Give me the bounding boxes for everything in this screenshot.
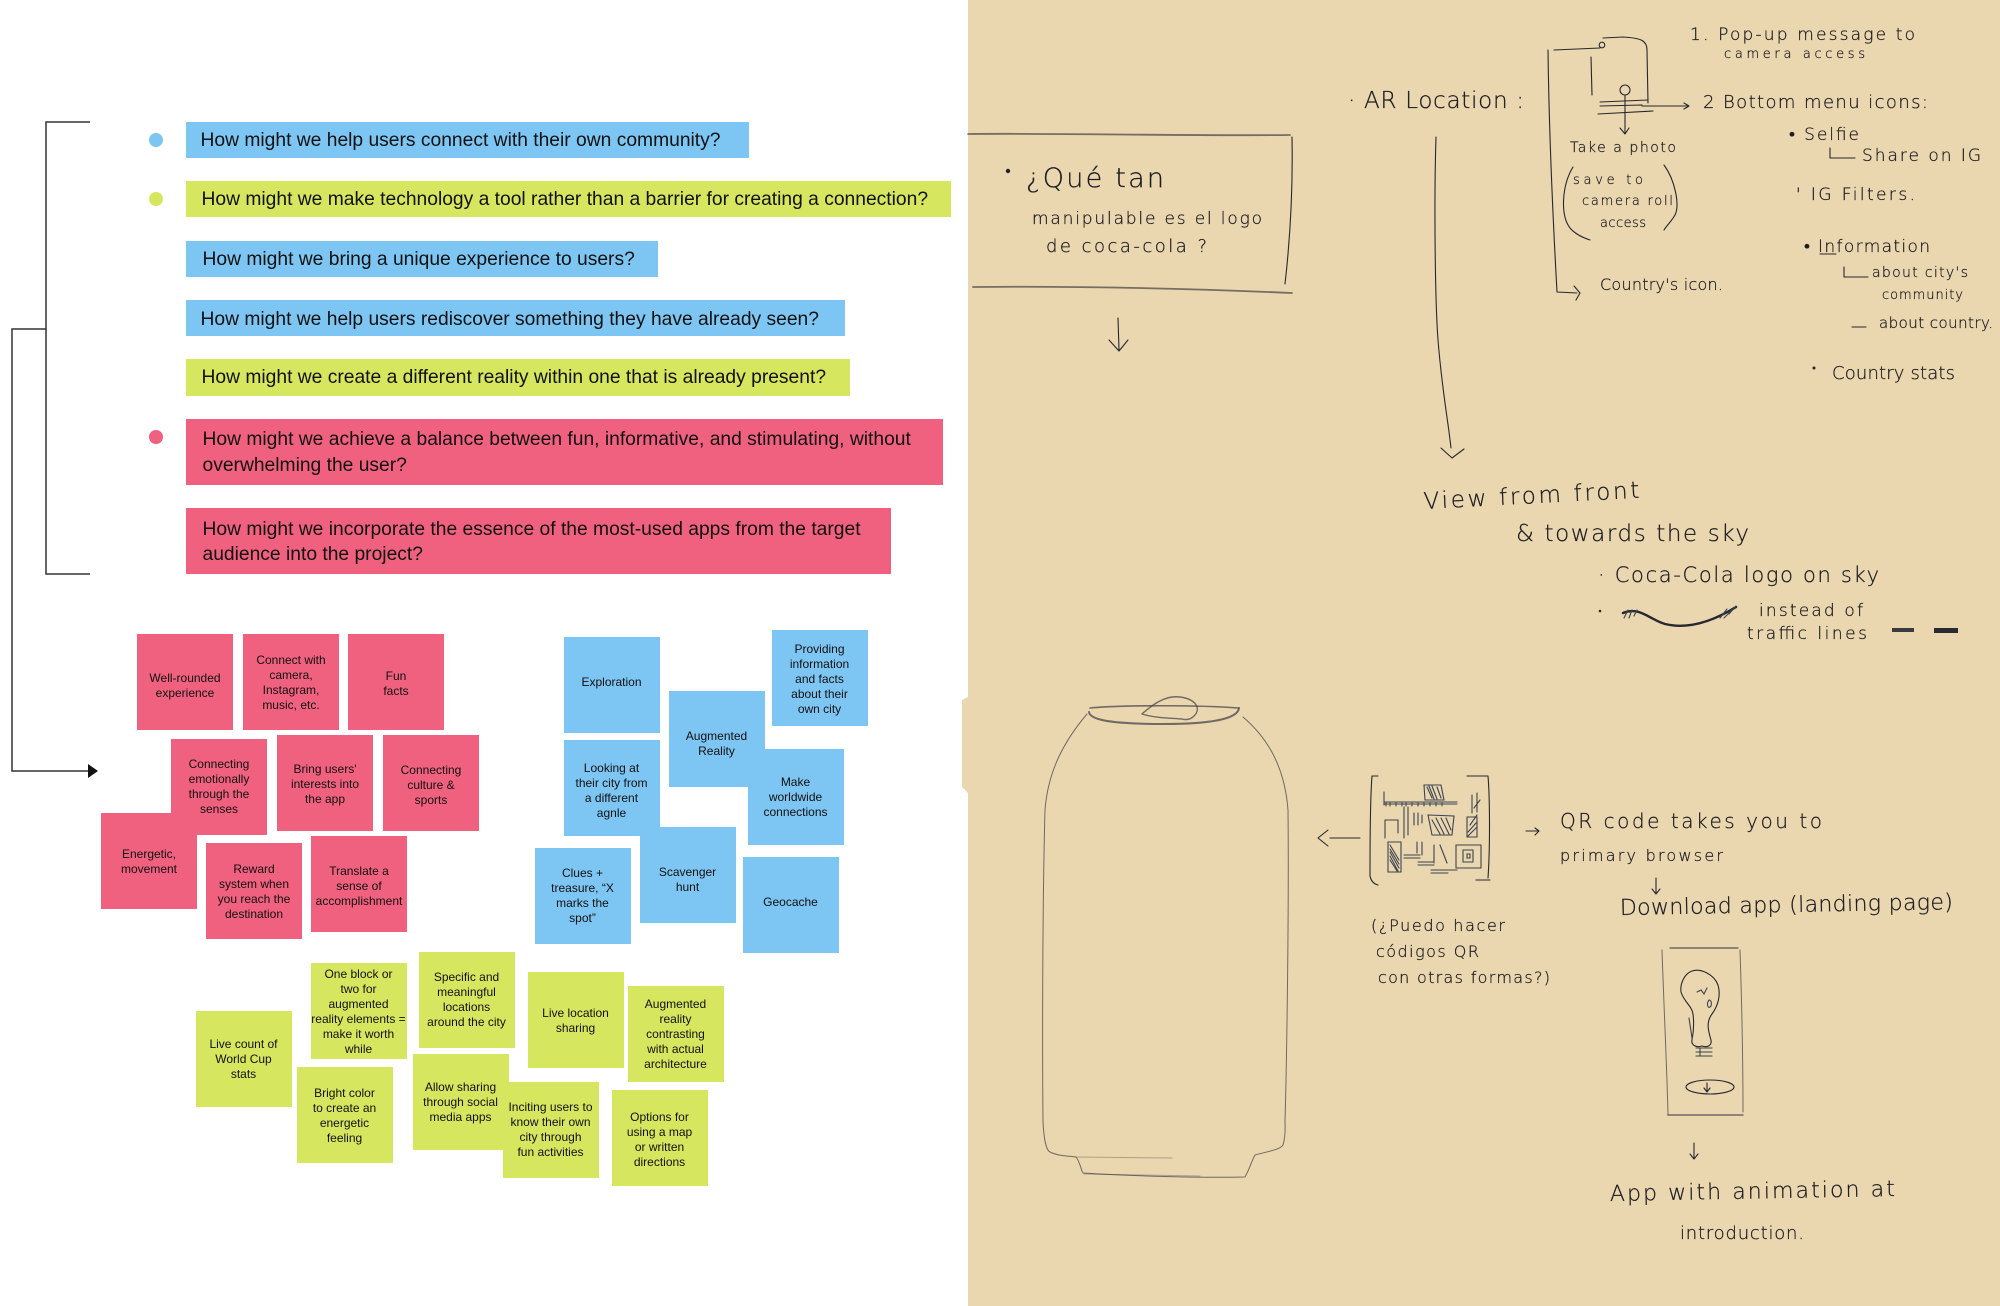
sticky: Options for [630, 1110, 689, 1124]
sticky: Bring users' [294, 762, 356, 776]
sticky: Live location [542, 1006, 609, 1020]
sticky [528, 972, 624, 1068]
sticky [137, 634, 233, 730]
sticky: with actual [647, 1042, 704, 1056]
sticky: Clues + [562, 866, 603, 880]
legend dot: pink [149, 430, 163, 444]
question bar: balance [186, 419, 942, 485]
sticky: accomplishment [316, 894, 402, 908]
sticky: Connect with [256, 653, 326, 667]
sticky: architecture [644, 1056, 707, 1070]
sticky: Exploration [581, 675, 642, 689]
notes: app with animation: App with animation at [1610, 1177, 1895, 1207]
sticky: stats [231, 1066, 256, 1080]
sticky [564, 740, 660, 836]
question bar: connect with community: How might we help users connect with their own community? [200, 130, 720, 151]
sketch: QR code [1370, 776, 1490, 885]
notes: view from front: traffic lines [1747, 624, 1867, 644]
question bar: most-used apps [186, 508, 890, 574]
sketch: question box: manipulable es el logo [1032, 209, 1262, 229]
sticky: make it worth [323, 1027, 394, 1041]
notes: pop-up and menu list: about country. [1879, 314, 1993, 332]
heading: AR Location: · AR Location : [1348, 88, 1524, 114]
sketch: phone flow diagram [1548, 37, 1723, 300]
notes: pop-up and menu list: about city's [1872, 265, 1968, 281]
question bar: unique experience: How might we bring a unique experience to users? [202, 249, 635, 270]
question bar: different reality: How might we create a different reality within one that is already present? [202, 367, 826, 388]
sticky: directions [634, 1155, 685, 1169]
sketch: phone flow diagram: Take a photo [1570, 140, 1676, 156]
sticky: Fun [386, 669, 406, 683]
arrow: QR to can [1318, 830, 1360, 846]
sticky [502, 1082, 598, 1178]
sketch: phone flow diagram: Country's icon. [1600, 275, 1723, 294]
sticky: Bright color [314, 1086, 375, 1100]
question bar: balance: overwhelming the user? [202, 455, 407, 476]
sketch: phone landing page with trophy [1662, 948, 1743, 1115]
sticky [277, 735, 373, 831]
sticky: own city [798, 702, 841, 716]
sticky: Augmented [686, 728, 747, 742]
sticky: contrasting [646, 1026, 705, 1040]
sticky: movement [121, 862, 177, 876]
sticky: locations [443, 1000, 490, 1014]
sticky: fun activities [517, 1145, 584, 1159]
sticky: Translate a [329, 864, 389, 878]
notes: pop-up and menu list: camera access [1724, 47, 1865, 62]
notes: QR shape question: con otras formas?) [1378, 968, 1550, 987]
question bar: rediscover: How might we help users rediscover something they have already seen? [200, 308, 819, 330]
sticky: Specific and [434, 970, 499, 984]
notes: QR shape question: (¿Puedo hacer [1371, 916, 1505, 935]
sticky: Looking at [584, 760, 639, 774]
sticky: city through [519, 1130, 582, 1144]
sticky: emotionally [189, 772, 249, 786]
notes: QR code takes you to browser: QR code takes you to [1560, 809, 1822, 833]
sticky: reality [659, 1012, 692, 1026]
sticky: connections [763, 805, 828, 819]
arrow: long line to view section [1435, 137, 1464, 458]
sticky: know their own [510, 1115, 591, 1129]
sticky [668, 690, 764, 786]
arrow: phone to app [1690, 1143, 1698, 1159]
notes: pop-up and menu list: Share on IG [1862, 146, 1981, 166]
sketch: question box: ¿Qué tan [1026, 163, 1164, 194]
sticky: World Cup [215, 1052, 272, 1066]
sticky [628, 986, 724, 1082]
sticky: spot” [569, 910, 596, 924]
notes: pop-up and menu list: ' IG Filters. [1796, 185, 1915, 205]
sticky: Instagram, [263, 683, 319, 697]
sticky [311, 836, 407, 932]
sticky notes: pink cluster [101, 634, 479, 939]
sticky: treasure, “X [551, 880, 614, 894]
sticky notes: blue cluster [535, 630, 868, 953]
sticky: marks the [556, 896, 609, 910]
sticky: Energetic, [122, 847, 176, 861]
notes: QR code takes you to browser: primary browser [1560, 846, 1723, 865]
sketch: question box [968, 134, 1292, 293]
sticky: Connecting [401, 762, 461, 776]
sticky [206, 843, 302, 939]
notes: pop-up and menu list: Country stats [1832, 363, 1955, 384]
sticky: through the [189, 786, 249, 800]
notes: view from front: View from front [1423, 478, 1640, 515]
question bar: connect with community [186, 122, 748, 158]
sticky [196, 1011, 292, 1107]
sticky: around the city [427, 1015, 506, 1029]
sticky: destination [225, 907, 283, 921]
sticky [418, 952, 514, 1048]
bracket connector with arrow [11, 121, 98, 778]
sticky: energetic [320, 1116, 369, 1130]
notes: QR shape question: códigos QR [1376, 942, 1479, 961]
sticky [348, 634, 444, 730]
sticky: worldwide [769, 790, 822, 804]
notes: view from front: instead of [1759, 601, 1863, 621]
sticky: their city from [575, 776, 648, 790]
sticky: through social [423, 1094, 498, 1108]
sketch: question box: de coca-cola ? [1046, 236, 1207, 257]
sticky [564, 636, 660, 732]
sticky: culture & [407, 778, 455, 792]
legend dot: blue [149, 133, 163, 147]
sticky: you reach the [218, 892, 290, 906]
sticky: Reward [233, 862, 275, 876]
sticky: sense of [336, 878, 382, 892]
sticky: while [345, 1042, 372, 1056]
question bar: technology as a tool: How might we make technology a tool rather than a barrier for creating a connection? [202, 189, 928, 210]
sticky: Make [781, 775, 810, 789]
sticky [383, 735, 479, 831]
sticky: augmented [328, 997, 389, 1011]
notes: view from front: · Coca-Cola logo on sky [1598, 563, 1879, 587]
sticky [412, 1054, 508, 1150]
question bar: rediscover [186, 300, 844, 336]
sticky: to create an [313, 1101, 376, 1115]
notes: app with animation: introduction. [1680, 1223, 1804, 1244]
notes: pop-up and menu list: 2 Bottom menu icons: [1703, 92, 1928, 113]
sticky: meaningful [437, 985, 496, 999]
sticky: two for [340, 982, 376, 996]
sketch: soda can [1043, 697, 1288, 1177]
notes: pop-up and menu list: • Information [1804, 237, 1930, 257]
sticky: feeling [327, 1131, 362, 1145]
notes: pop-up and menu list: • Selfie [1789, 125, 1859, 145]
sticky: a different [585, 790, 638, 804]
sketch: phone flow diagram: access [1600, 216, 1646, 231]
notes: QR code takes you to browser: Download app (landing page) [1620, 890, 1953, 921]
sticky: facts [383, 684, 409, 698]
sticky: senses [200, 802, 238, 816]
sticky [748, 748, 844, 844]
sticky [171, 738, 267, 834]
sticky: experience [156, 686, 214, 700]
sticky: system when [219, 877, 289, 891]
question bar: different reality [186, 359, 850, 396]
notes: pop-up and menu list: 1. Pop-up message to [1690, 25, 1915, 45]
sticky: using a map [627, 1125, 692, 1139]
notes: view from front [1423, 478, 1958, 644]
sticky [101, 813, 197, 909]
sticky: Geocache [763, 895, 818, 909]
sticky: music, etc. [262, 698, 320, 712]
sketch: phone flow diagram: save to [1573, 173, 1643, 188]
sticky: Augmented [645, 996, 706, 1010]
sticky [534, 848, 630, 944]
arrow: down from question box [1109, 318, 1128, 351]
sticky: or written [635, 1140, 684, 1154]
question bar: most-used apps: audience into the project? [202, 544, 423, 565]
sticky [742, 856, 838, 952]
sticky: Reality [698, 744, 735, 758]
sticky: Connecting [189, 756, 249, 770]
sticky: reality elements = [311, 1012, 406, 1026]
sketch: phone flow diagram: camera roll [1582, 194, 1673, 209]
sticky: hunt [676, 880, 699, 894]
notes: QR shape question [1371, 916, 1550, 987]
legend dot: green [149, 192, 163, 206]
notes: pop-up and menu list: community [1882, 288, 1963, 303]
notes: view from front: & towards the sky [1516, 521, 1749, 547]
panel: how might we questions [149, 122, 951, 574]
sticky: Scavenger [659, 864, 716, 878]
sticky: Allow sharing [425, 1080, 496, 1094]
notes: pop-up and menu list [1690, 25, 1993, 384]
sticky: camera, [269, 668, 313, 682]
sticky: interests into [291, 776, 359, 790]
notes: QR code takes you to browser [1526, 809, 1953, 921]
sticky [772, 630, 868, 726]
sticky: and facts [795, 672, 844, 686]
sticky: Live count of [209, 1036, 278, 1050]
question bar: technology as a tool [186, 181, 950, 217]
sticky: One block or [324, 967, 393, 981]
question bar: balance: How might we achieve a balance between fun, informative, and stimulating, without [202, 428, 911, 450]
sticky: the app [305, 792, 345, 806]
notes: app with animation [1610, 1177, 1895, 1244]
sticky: about their [791, 687, 848, 701]
sticky: media apps [429, 1110, 492, 1124]
question bar: unique experience [186, 241, 658, 277]
sticky: Providing [794, 642, 845, 656]
sticky: sports [415, 792, 447, 806]
sticky: information [790, 657, 849, 671]
sticky notes: green cluster [196, 952, 724, 1186]
sticky: Inciting users to [508, 1100, 593, 1114]
sticky: sharing [556, 1021, 595, 1035]
sticky [243, 634, 339, 730]
sticky [310, 963, 406, 1059]
sticky [612, 1090, 708, 1186]
sticky [296, 1067, 392, 1163]
sticky: agnle [597, 806, 626, 820]
sticky: Well-rounded [149, 671, 221, 685]
question bar: most-used apps: How might we incorporate the essence of the most-used apps from the target [202, 518, 861, 540]
sticky [640, 826, 736, 922]
